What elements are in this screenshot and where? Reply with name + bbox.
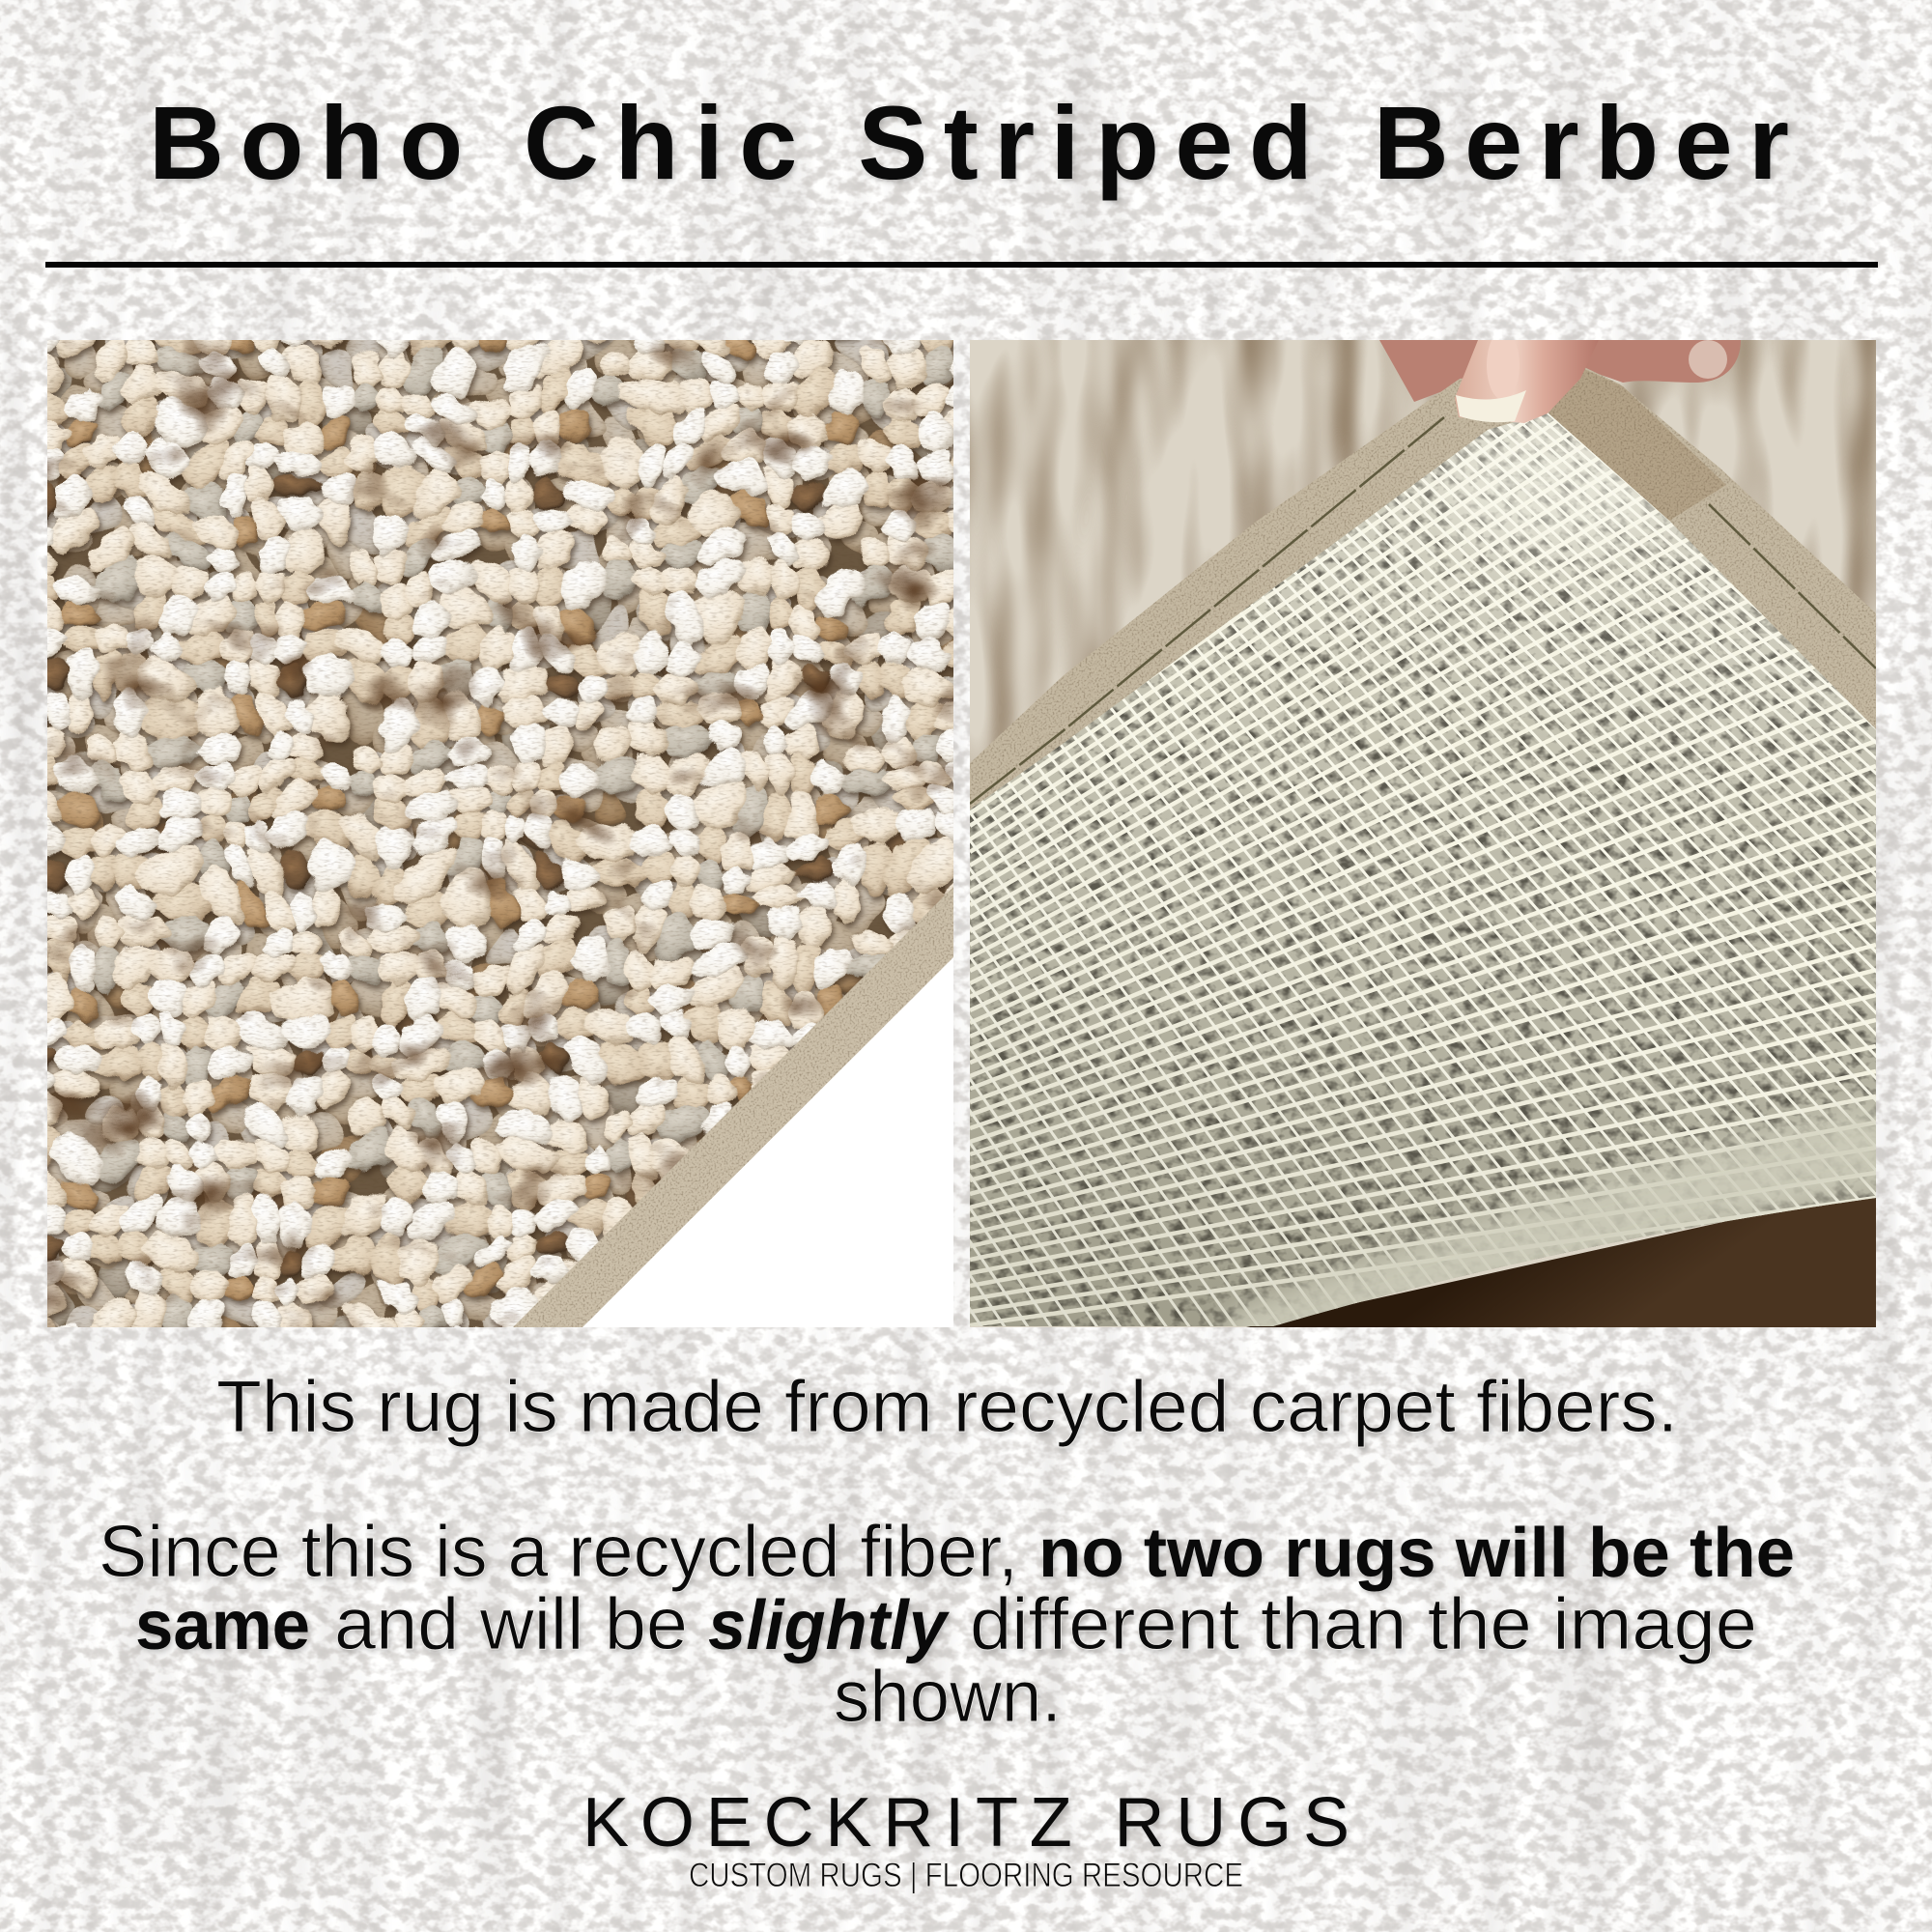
carpet binding edge (513, 887, 953, 1327)
text block: no two rugs alike: same (135, 1587, 310, 1664)
rug backing: mesh area (300, 55, 1932, 1352)
rug edge binding (970, 367, 1876, 840)
title: Boho Chic Striped Berber (149, 84, 1789, 201)
binding stitches (970, 417, 1876, 804)
panel: left photo, carpet pile close-up (47, 340, 953, 1327)
title divider rule (45, 262, 1878, 268)
brand name: KOECKRITZ RUGS (582, 1784, 1350, 1861)
tonal shading across backing (970, 340, 1876, 1327)
text block: no two rugs alike: shown. (834, 1656, 1062, 1738)
text block: no two rugs alike (99, 1511, 1795, 1738)
latex glue haze near corner (1439, 435, 1671, 551)
binding corner tab (1548, 369, 1726, 521)
text block: no two rugs alike: different than the image (970, 1583, 1757, 1665)
mesh lines rising to the right (970, 55, 1876, 1325)
brand tagline: CUSTOM RUGS | FLOORING RESOURCE (689, 1857, 1243, 1894)
back fingers behind the rug (1379, 340, 1741, 402)
white corner cut-out (582, 957, 953, 1327)
mesh lines descending to the right (300, 340, 1932, 1352)
floor below rug (1246, 1188, 1876, 1327)
text block: no two rugs alike: Since this is a recycled fiber, (99, 1511, 1018, 1593)
text block: no two rugs alike: slightly (708, 1587, 951, 1664)
mottled fibres beneath mesh (970, 340, 1876, 1327)
front finger pinching the corner (1455, 330, 1599, 423)
panel: right photo, rug backing with hand (970, 340, 1876, 1327)
blurred carpet background (970, 340, 1876, 1327)
carpet loops texture (47, 340, 953, 1327)
text block: no two rugs alike: and will be (334, 1583, 688, 1665)
soft out-of-focus rolled edge (1236, 1140, 1893, 1352)
text block: no two rugs alike: no two rugs will be the (1038, 1515, 1795, 1592)
sentence one: This rug is made from recycled carpet fibers. (216, 1366, 1678, 1448)
